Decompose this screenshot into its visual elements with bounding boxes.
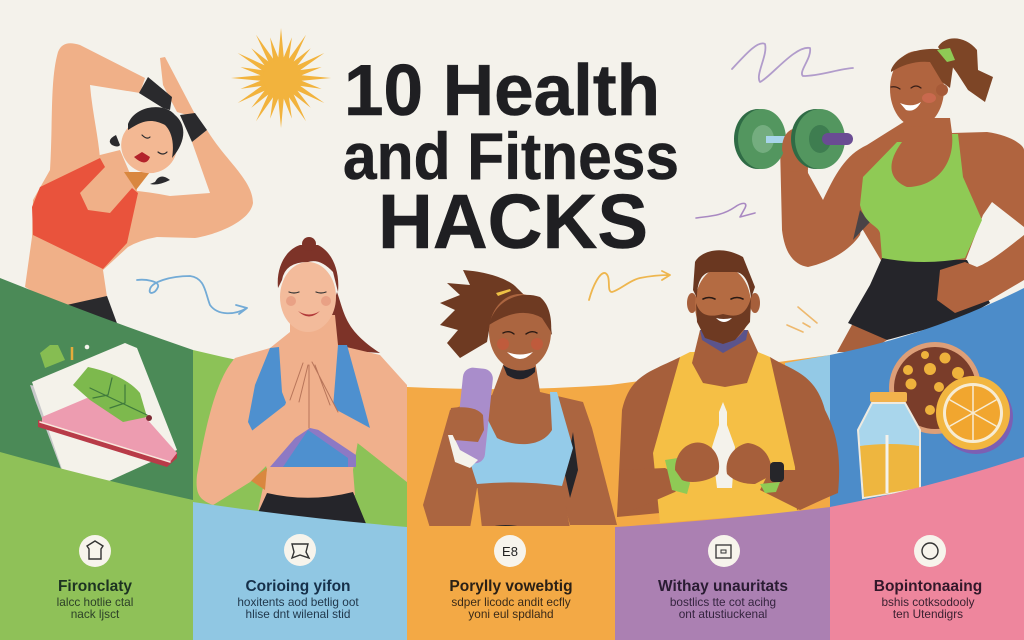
icon: sun bbox=[231, 28, 331, 128]
panel text: Bopintonaaing: ten Utendigrs bbox=[893, 607, 963, 621]
panel text: Bopintonaaing: bshis cotksodooly bbox=[881, 595, 975, 609]
bottom colour panels bbox=[0, 452, 1024, 640]
panel text: Withay unauritats: bostlics tte cot acihg bbox=[670, 595, 776, 609]
figure: woman with blue top, praying hands bbox=[197, 237, 407, 526]
small purple squiggle bbox=[696, 203, 755, 218]
panel text: Corioing yifon bbox=[237, 534, 359, 621]
purple squiggle bbox=[732, 43, 853, 82]
arrow: yellow squiggle bbox=[589, 271, 670, 300]
panel text: Poryily vowebtig: yoni eul spdlahd bbox=[468, 607, 554, 621]
panel text: Fironclaty: nack ljsct bbox=[71, 607, 120, 621]
illustration: notebook with leaf and food bbox=[30, 343, 177, 482]
panel text: Fironclaty bbox=[57, 535, 133, 621]
panel text: Withay unauritats: Withay unauritats bbox=[658, 578, 788, 595]
panel text: Poryily vowebtig: Porylly vowebtig bbox=[449, 578, 573, 595]
panel text: Fironclaty: lalcc hotlie ctal bbox=[57, 595, 133, 609]
title: HACKS bbox=[378, 179, 648, 265]
figure: woman stretching, top left bbox=[25, 43, 253, 326]
figure: woman with bottle, centre bbox=[423, 270, 617, 528]
panel text: Withay unauritats: ont atustiuckenal bbox=[679, 607, 767, 621]
illustration: juice jar, granola bowl and orange bbox=[858, 342, 1013, 498]
icon: dumbbell bbox=[734, 109, 853, 172]
panel text: Withay unauritats bbox=[658, 535, 788, 621]
panel text: Poryily vowebtig: sdper licodc andit ecfly bbox=[451, 595, 571, 609]
panel text: Bopintonaaing: Bopintonaaing bbox=[874, 578, 982, 595]
title bbox=[343, 51, 679, 265]
sparkle strokes bbox=[787, 307, 817, 332]
panel text: Fironclaty: Fironclaty bbox=[58, 578, 132, 595]
panel text: Poryily vowebtig: E8 bbox=[502, 544, 518, 559]
panel text: Corioing yifon: hoxitents aod betlig oot bbox=[237, 595, 359, 609]
panel text: Bopintonaaing bbox=[874, 535, 982, 621]
panel text: Corioing yifon: hlise dnt wilenal stid bbox=[246, 607, 350, 621]
panel text: Corioing yifon: Corioing yifon bbox=[245, 578, 351, 595]
panel text: Poryily vowebtig bbox=[449, 535, 573, 621]
upper colour bands bbox=[0, 278, 830, 530]
title: and Fitness bbox=[343, 119, 679, 193]
arrow: blue squiggle bbox=[137, 276, 247, 314]
figure: bearded man in yellow tank bbox=[617, 250, 839, 523]
figure: woman with dumbbell, top right bbox=[780, 38, 1024, 352]
upper right blue band bbox=[830, 288, 1024, 520]
title: 10 Health bbox=[344, 51, 660, 131]
